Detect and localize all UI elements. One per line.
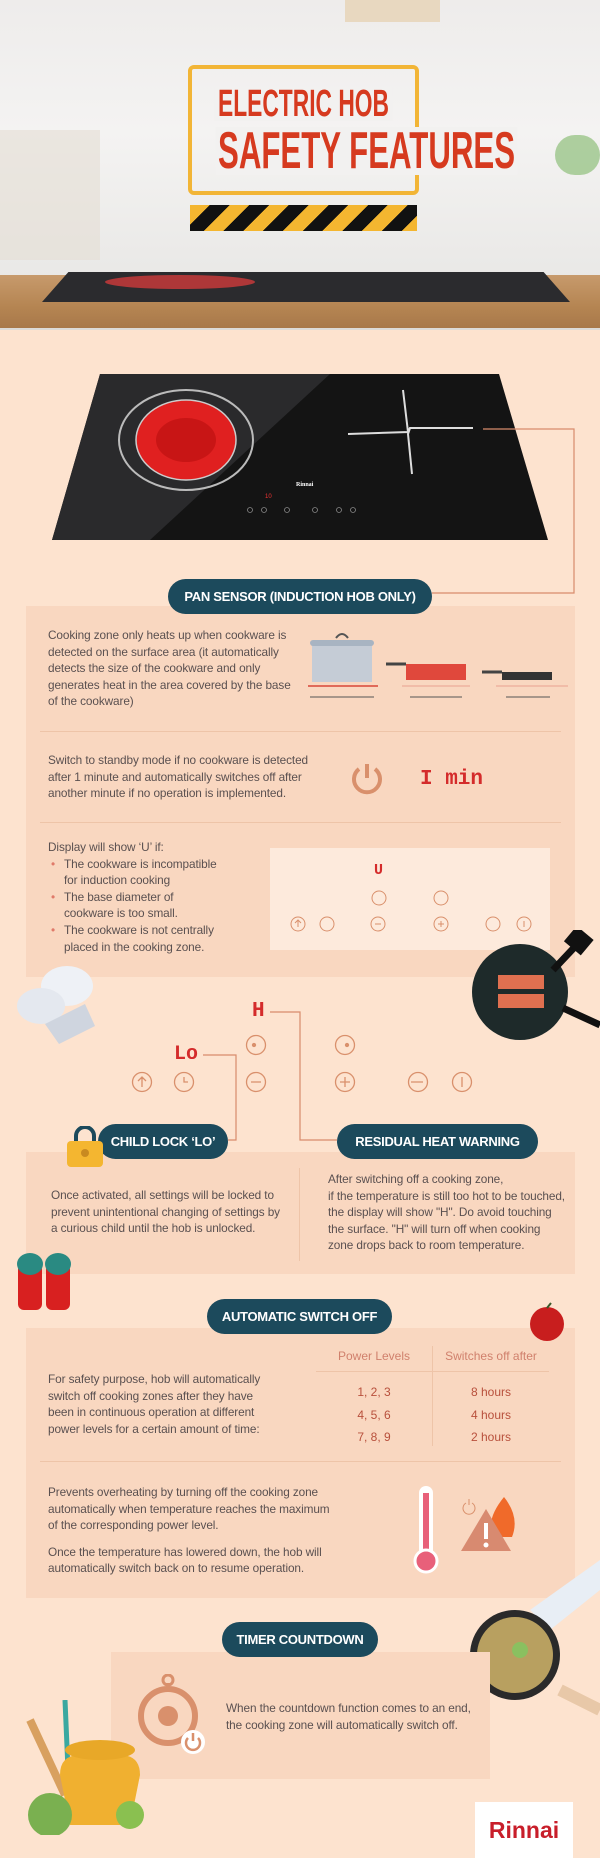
pill: residual heat: RESIDUAL HEAT WARNING <box>355 1134 520 1149</box>
pill: automatic switch off <box>207 1299 392 1334</box>
text: auto switch off: switch off cooking zones after they have <box>48 1389 253 1403</box>
counter wood <box>0 275 600 328</box>
table: power levels: Power Levels <box>338 1349 410 1363</box>
text: residual heat <box>328 1172 565 1252</box>
icon: hand stirring pot <box>470 1560 600 1716</box>
panel: child lock & residual heat <box>26 1152 575 1274</box>
text: auto switch off: For safety purpose, hob will automatically <box>48 1372 260 1386</box>
pill: timer countdown <box>222 1622 378 1657</box>
table: power levels: 2 hours <box>471 1430 511 1444</box>
text: cookware detection: of the cookware) <box>48 694 134 708</box>
text: display U: for induction cooking <box>64 873 170 887</box>
text: display U: • <box>51 923 55 937</box>
text: standby <box>48 753 308 800</box>
pill: pan sensor: PAN SENSOR (INDUCTION HOB ONLY) <box>184 589 416 604</box>
text: residual heat: if the temperature is still too hot to be touched, <box>328 1189 565 1203</box>
icon: stopwatch <box>138 1674 205 1754</box>
table: power levels: 7, 8, 9 <box>357 1430 391 1444</box>
panel: pan sensor <box>26 606 575 977</box>
title: ELECTRIC HOB <box>218 83 389 125</box>
hazard stripe <box>190 205 417 231</box>
panel: automatic switch off <box>26 1328 575 1598</box>
text: cookware detection: detected on the surface area (it automatically <box>48 645 279 659</box>
table: power levels: 1, 2, 3 <box>357 1385 391 1399</box>
table: power levels: 8 hours <box>471 1385 511 1399</box>
text: child lock: a curious child until the hob is unlocked. <box>51 1221 255 1235</box>
1 min display: I min <box>420 768 483 791</box>
text: display U: Display will show ‘U’ if: <box>48 840 164 854</box>
text: display U: cookware is too small. <box>64 906 178 920</box>
control panel U <box>270 848 550 950</box>
connector line: pan sensor <box>432 428 575 594</box>
hob display: H and Lo with controls: H <box>252 1000 265 1023</box>
connector lines H and Lo <box>203 1011 337 1141</box>
text: child lock <box>51 1188 280 1235</box>
text: display U: placed in the cooking zone. <box>64 940 204 954</box>
text: display U: • <box>51 890 55 904</box>
text: cookware detection: generates heat in the area covered by the base <box>48 678 291 692</box>
table: power levels <box>316 1346 549 1446</box>
text: auto switch off: been in continuous operation at different <box>48 1405 254 1419</box>
text: overheating: Prevents overheating by turning off the cooking zone <box>48 1485 318 1499</box>
table: power levels: Switches off after <box>445 1349 537 1363</box>
text: overheating: Once the temperature has lowered down, the hob will <box>48 1545 322 1559</box>
text: overheating: automatically switch back on to resume operation. <box>48 1561 304 1575</box>
text: timer: the cooking zone will automatically switch off. <box>226 1718 458 1732</box>
icon: pot and vegetables <box>26 1700 144 1835</box>
pill: child lock <box>98 1124 228 1159</box>
logo: Rinnai: Rinnai <box>489 1817 559 1843</box>
pill: child lock: CHILD LOCK ‘LO’ <box>111 1134 215 1149</box>
text: residual heat: zone drops back to room temperature. <box>328 1238 524 1252</box>
text: residual heat: the surface. "H" will turn off when cooking <box>328 1222 540 1236</box>
text: timer <box>226 1701 471 1732</box>
icon: power <box>352 764 382 794</box>
text: auto switch off <box>48 1372 260 1436</box>
pill: pan sensor <box>168 579 432 614</box>
text: standby: another minute if no operation is implemented. <box>48 786 286 800</box>
icon: pots sizes <box>308 633 568 698</box>
title: SAFETY FEATURES <box>218 122 515 180</box>
table: power levels: 4 hours <box>471 1408 511 1422</box>
icon: padlock <box>67 1126 103 1167</box>
header: kitchen photo background <box>0 0 600 330</box>
hob display: H and Lo with controls <box>132 1000 472 1092</box>
text: display U: The cookware is not centrally <box>64 923 214 937</box>
big hob illustration <box>52 374 548 540</box>
text: standby: Switch to standby mode if no cookware is detected <box>48 753 308 767</box>
text: child lock: Once activated, all settings will be locked to <box>51 1188 274 1202</box>
text: display U: • <box>51 857 55 871</box>
text: overheating <box>48 1485 330 1575</box>
text: auto switch off: power levels for a certain amount of time: <box>48 1422 260 1436</box>
text: display U: The cookware is incompatible <box>64 857 217 871</box>
text: residual heat: the display will show "H". Do avoid touching <box>328 1205 552 1219</box>
icon: frying pan with salmon <box>472 930 600 1040</box>
icon: thermometer and warning <box>414 1486 515 1574</box>
pill: automatic switch off: AUTOMATIC SWITCH OFF <box>222 1309 377 1324</box>
big hob illustration: Rinnai <box>296 482 314 488</box>
big hob illustration: 10 <box>265 494 272 500</box>
text: cookware detection: detects the size of the cookware and only <box>48 661 260 675</box>
title <box>188 65 515 231</box>
table: power levels: 4, 5, 6 <box>357 1408 391 1422</box>
icon: salt and pepper shakers <box>17 1253 71 1310</box>
icon: tomato <box>530 1302 564 1341</box>
text: cookware detection: Cooking zone only heats up when cookware is <box>48 628 286 642</box>
text: overheating: automatically when temperature reaches the maximum <box>48 1502 330 1516</box>
text: child lock: prevent unintentional changing of settings by <box>51 1205 280 1219</box>
logo: Rinnai <box>475 1802 573 1858</box>
text: display U: The base diameter of <box>64 890 173 904</box>
text: timer: When the countdown function comes to an end, <box>226 1701 471 1715</box>
text: display U <box>48 840 217 954</box>
icon: chef hat <box>17 966 95 1044</box>
text: standby: after 1 minute and automatically switches off after <box>48 770 302 784</box>
text: overheating: of the corresponding power level. <box>48 1518 218 1532</box>
small hob on counter <box>42 272 570 302</box>
pill: timer countdown: TIMER COUNTDOWN <box>237 1632 363 1647</box>
hob display: H and Lo with controls: Lo <box>174 1043 198 1066</box>
text: cookware detection <box>48 628 291 708</box>
control panel U: U <box>374 862 383 879</box>
panel: timer <box>111 1652 490 1779</box>
text: residual heat: After switching off a cooking zone, <box>328 1172 503 1186</box>
pill: residual heat <box>337 1124 538 1159</box>
